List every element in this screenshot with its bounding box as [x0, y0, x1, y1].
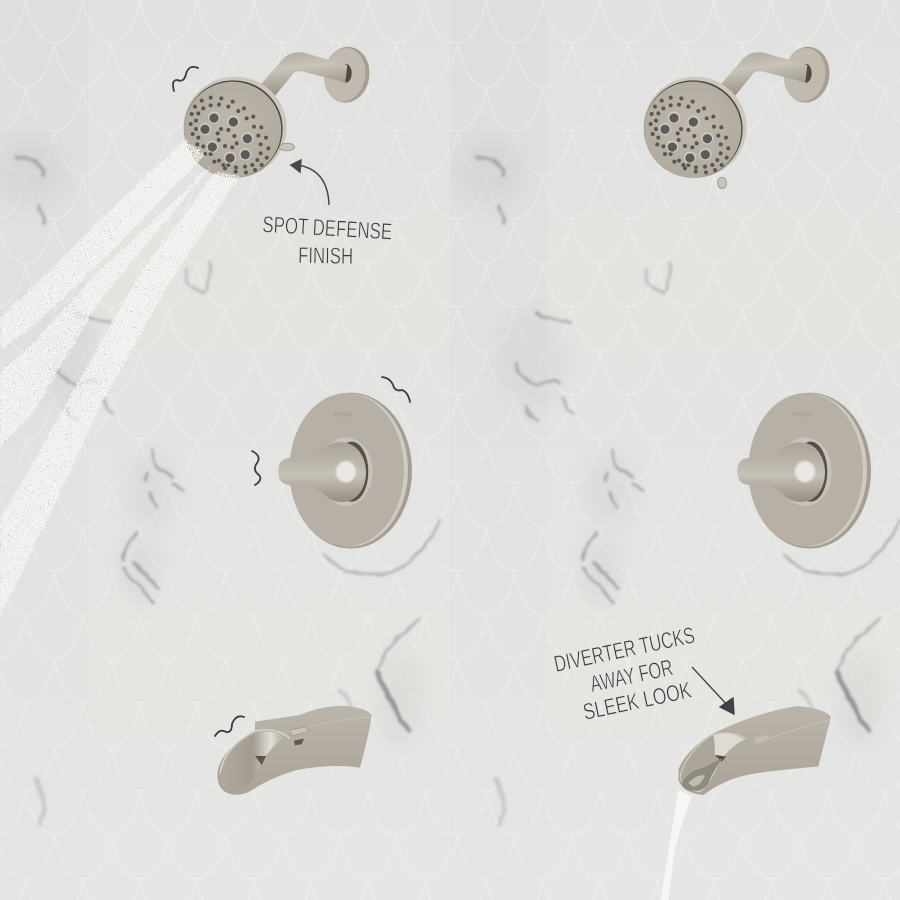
water stream — [661, 790, 692, 900]
callout text: spot defense finish: SPOT DEFENSE — [262, 211, 393, 244]
background: right wall panel — [450, 0, 900, 900]
background: left wall panel — [0, 0, 450, 900]
valve trim plate and handle: left panel — [278, 393, 412, 549]
water spray from the shower head — [0, 140, 240, 615]
shower head: left panel — [183, 44, 373, 178]
icon: right shower selector knob — [718, 178, 726, 188]
squiggle: shower head left — [173, 67, 198, 91]
shower head: right panel — [643, 44, 833, 189]
callout text: spot defense finish — [262, 211, 393, 269]
squiggle: valve left — [252, 451, 260, 485]
callout text: diverter tucks away for sleek look — [552, 622, 697, 725]
tub spout: left panel — [217, 706, 372, 795]
valve trim plate and handle: right panel — [737, 393, 871, 549]
dark flecks in the spray — [0, 170, 190, 615]
icon: left shower selector knob — [280, 143, 294, 151]
squiggle: spout — [215, 716, 244, 736]
callout arrow: diverter — [692, 667, 734, 714]
tub spout with water: right panel — [661, 706, 831, 900]
callout text: spot defense finish: FINISH — [298, 242, 353, 269]
icon: water in spout basin — [682, 758, 723, 791]
squiggle: valve top — [382, 377, 410, 402]
callout text: diverter tucks away for sleek look: DIVERTER TUCKS — [552, 622, 697, 677]
callout arrow: spot defense — [291, 160, 329, 205]
callout text: diverter tucks away for sleek look: AWAY FOR — [588, 654, 675, 697]
callout text: diverter tucks away for sleek look: SLEEK LOOK — [581, 676, 694, 725]
icon: diverter tab — [290, 727, 307, 736]
